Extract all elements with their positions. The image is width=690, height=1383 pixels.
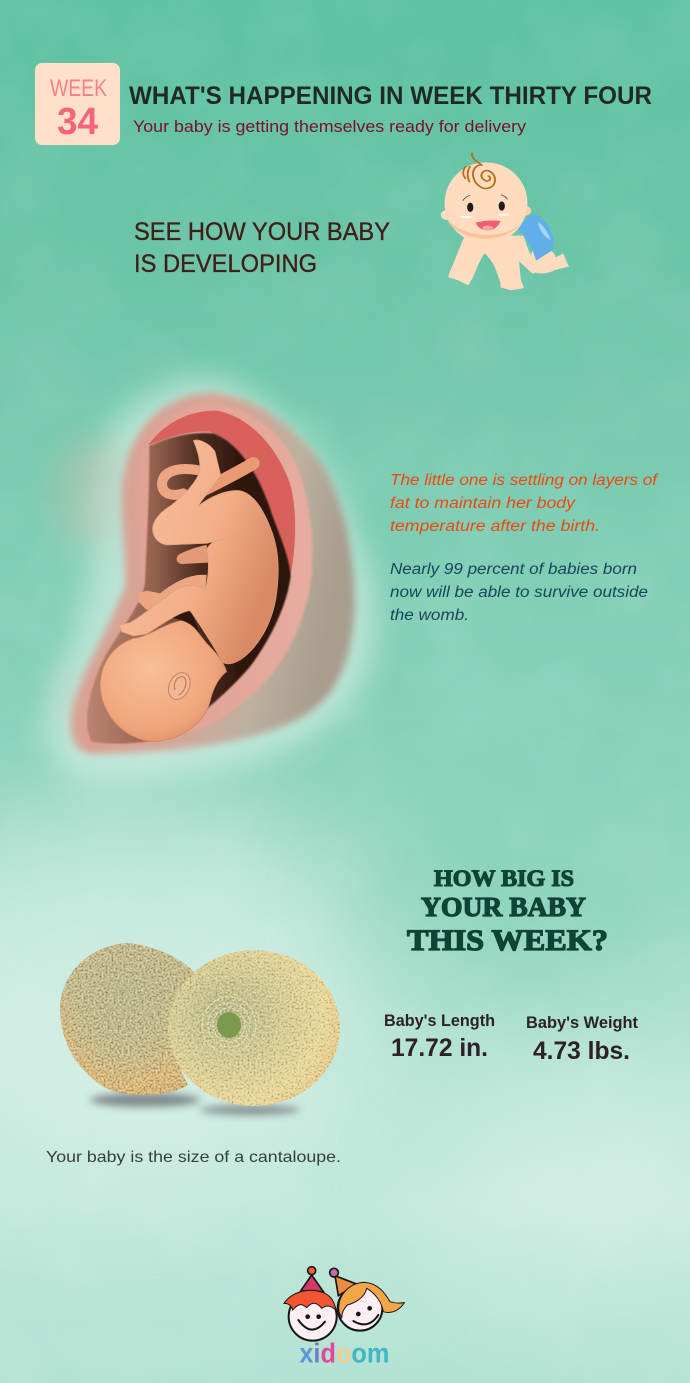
baby curl hair bbox=[463, 153, 495, 188]
stat: length: Baby's Length bbox=[384, 1011, 495, 1030]
gap between leg and head bbox=[168, 608, 200, 633]
baby far leg bbox=[138, 575, 207, 610]
boy face bbox=[284, 1290, 337, 1341]
callout: fat layers: temperature after the birth. bbox=[390, 518, 600, 535]
baby head bbox=[445, 162, 527, 244]
outer womb wall bbox=[71, 393, 355, 754]
callout: fat layers bbox=[390, 472, 659, 535]
smoky left shadow bbox=[50, 433, 130, 547]
week badge: WEEK bbox=[50, 75, 107, 102]
left melon bbox=[60, 943, 194, 1095]
heading: how big: HOW BIG IS bbox=[434, 866, 574, 891]
placenta bbox=[148, 411, 295, 575]
callout: fat layers: The little one is settling on layers of bbox=[390, 472, 659, 489]
melon stem spot bbox=[217, 1012, 241, 1038]
umbilical cord bbox=[162, 463, 253, 495]
stat: weight: Baby's Weight bbox=[526, 1013, 638, 1032]
heading: how big bbox=[407, 866, 608, 957]
caption: Your baby is the size of a cantaloupe. bbox=[46, 1149, 341, 1166]
womb illustration bbox=[48, 377, 377, 783]
icon: crawling baby bbox=[441, 153, 569, 289]
baby diaper bbox=[518, 213, 554, 261]
baby ear bbox=[441, 210, 453, 220]
title: WHAT'S HAPPENING IN WEEK THIRTY FOUR bbox=[129, 82, 652, 110]
callout: fat layers: fat to maintain her body bbox=[390, 495, 576, 512]
callout: survival: the womb. bbox=[390, 607, 469, 624]
inner wall bbox=[84, 403, 312, 748]
baby head bbox=[100, 621, 227, 742]
stat: length: 17.72 in. bbox=[391, 1034, 488, 1062]
baby ear bbox=[164, 669, 194, 703]
baby face bbox=[467, 203, 473, 212]
week badge: 34 bbox=[57, 101, 98, 143]
heading: how big: THIS WEEK? bbox=[407, 924, 608, 957]
subtitle: Your baby is getting themselves ready for delivery bbox=[133, 118, 527, 136]
girl party hat bbox=[330, 1268, 357, 1296]
amniotic cavity bbox=[87, 433, 291, 744]
section heading: development: SEE HOW YOUR BABY bbox=[134, 218, 390, 246]
callout: survival: now will be able to survive outside bbox=[390, 584, 648, 601]
pale halo bbox=[48, 377, 377, 783]
callout: survival bbox=[390, 561, 648, 624]
wordmark: xidoom bbox=[299, 1337, 389, 1368]
baby back leg bbox=[526, 247, 569, 273]
logo bbox=[284, 1267, 404, 1368]
baby body and arms bbox=[450, 237, 534, 289]
heading: how big: YOUR BABY bbox=[421, 892, 586, 922]
right melon bbox=[165, 948, 345, 1108]
section heading: development bbox=[134, 218, 390, 278]
week badge bbox=[35, 63, 120, 145]
boy party hat bbox=[301, 1267, 323, 1292]
cantaloupes bbox=[55, 940, 345, 1115]
melon shadows bbox=[90, 1093, 300, 1115]
stat: length bbox=[384, 1011, 495, 1062]
girl face bbox=[338, 1282, 404, 1331]
baby body and legs bbox=[119, 440, 278, 664]
callout: survival: Nearly 99 percent of babies born bbox=[390, 561, 637, 578]
melon stem rings bbox=[202, 997, 256, 1053]
baby arm behind bbox=[177, 545, 208, 564]
stat: weight bbox=[526, 1013, 638, 1065]
stat: weight: 4.73 lbs. bbox=[533, 1037, 630, 1065]
section heading: development: IS DEVELOPING bbox=[134, 250, 317, 278]
